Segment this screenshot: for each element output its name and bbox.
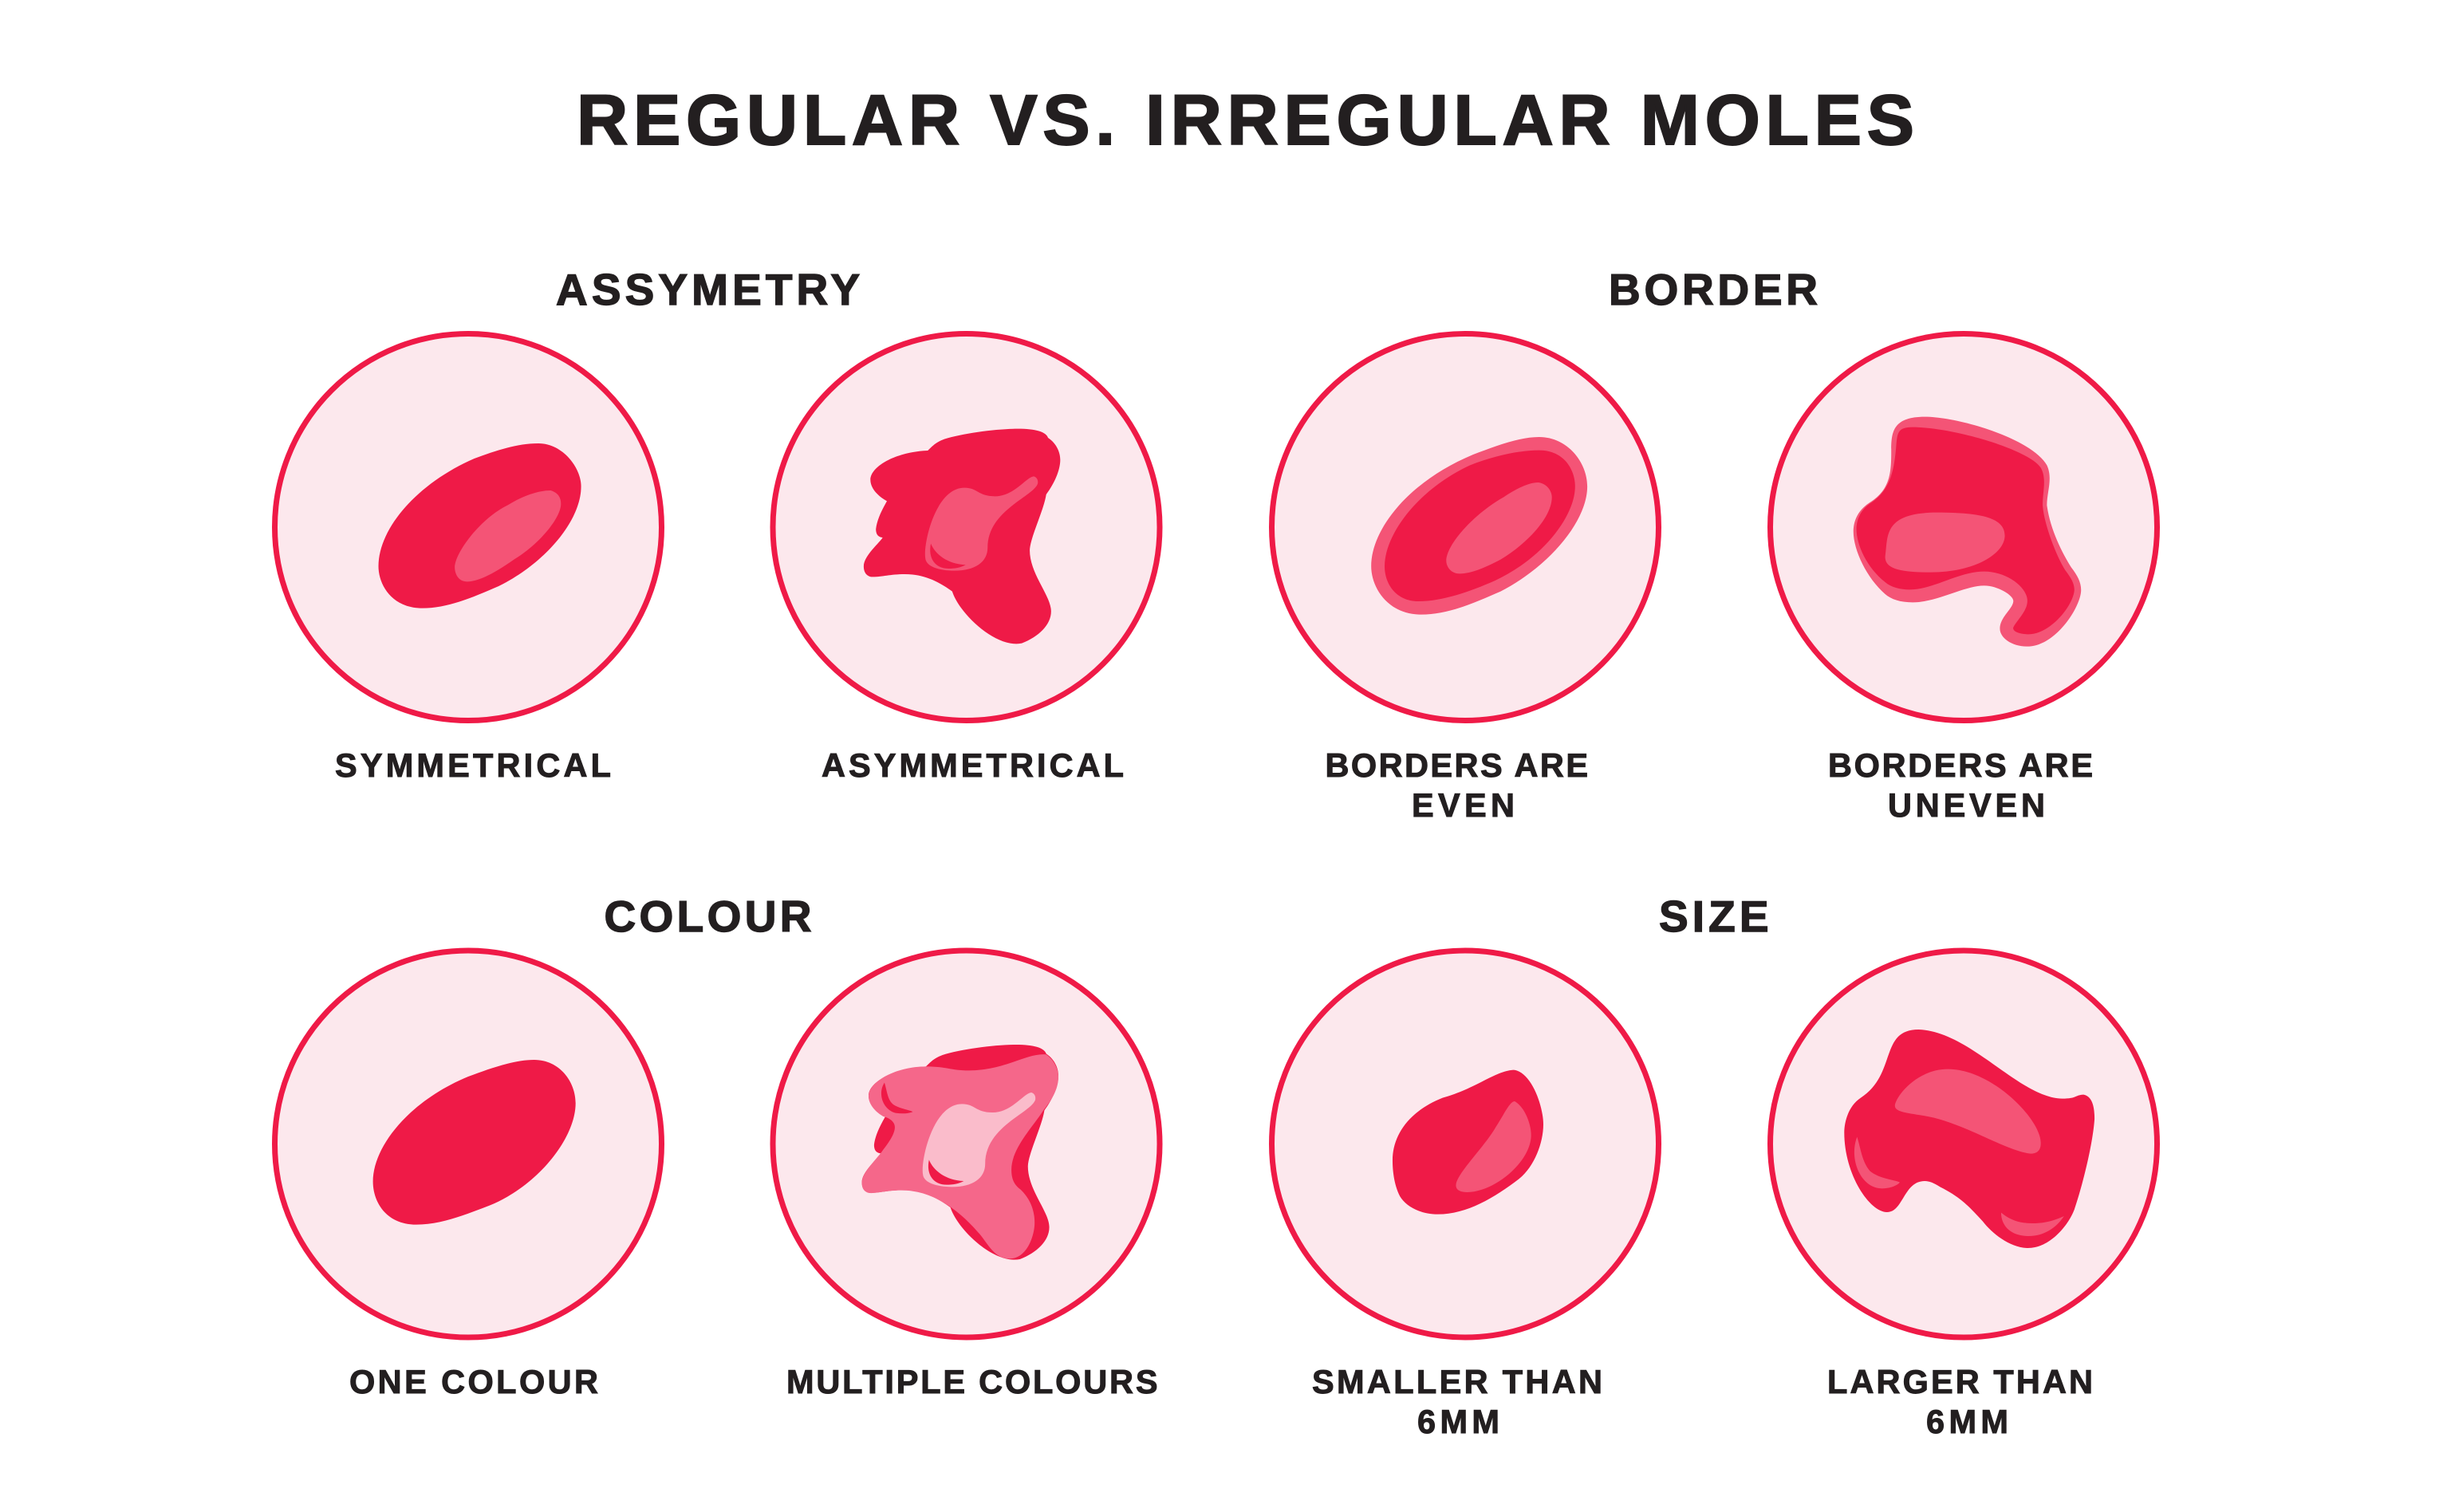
icon: symmetrical mole: [378, 443, 581, 608]
label: one colour: ONE COLOUR: [349, 1363, 598, 1400]
label: asymmetrical: ASYMMETRICAL: [822, 746, 1124, 784]
panel: large mole: [1771, 951, 2157, 1440]
icon: large mole: [1844, 1030, 2094, 1248]
circle background: [1771, 333, 2157, 721]
icon: one colour mole: [373, 1060, 576, 1225]
label: borders are even: BORDERS ARE: [1326, 746, 1588, 784]
panel: asymmetry section: [274, 265, 1160, 784]
panel: small mole: [1271, 951, 1659, 1440]
panel: size section: [1271, 892, 2157, 1440]
label: symmetrical: SYMMETRICAL: [335, 746, 611, 784]
panel: symmetrical mole: [274, 333, 662, 784]
circle background: [1271, 951, 1659, 1337]
panel: colour section: [274, 892, 1160, 1400]
label: borders are even: EVEN: [1412, 786, 1515, 824]
label: borders are uneven: [1828, 746, 2093, 824]
panel: uneven border mole: [1771, 333, 2157, 824]
heading: colour: COLOUR: [605, 892, 812, 941]
label: borders are even: [1326, 746, 1588, 824]
panel: one colour mole: [274, 951, 662, 1400]
icon: asymmetrical mole: [864, 429, 1060, 644]
label: smaller than 6mm: SMALLER THAN: [1312, 1363, 1602, 1400]
label: larger than 6mm: [1827, 1363, 2093, 1440]
label: larger than 6mm: 6MM: [1926, 1403, 2008, 1440]
icon: uneven border mole: [1854, 417, 2081, 647]
circle background: [274, 333, 662, 721]
circle background: [773, 951, 1160, 1337]
heading: size: SIZE: [1659, 892, 1769, 941]
label: multiple colours: MULTIPLE COLOURS: [786, 1363, 1158, 1400]
circle background: [274, 951, 662, 1337]
panel: asymmetrical mole: [773, 333, 1160, 784]
circle background: [773, 333, 1160, 721]
panel: border section: [1271, 265, 2157, 824]
label: borders are uneven: BORDERS ARE: [1828, 746, 2093, 784]
icon: even border mole: [1371, 437, 1587, 615]
label: smaller than 6mm: 6MM: [1417, 1403, 1499, 1440]
heading: border: BORDER: [1609, 265, 1818, 314]
label: smaller than 6mm: [1312, 1363, 1602, 1440]
panel: even border mole: [1271, 333, 1659, 824]
icon: multiple colours mole: [862, 1045, 1058, 1260]
circle background: [1771, 951, 2157, 1337]
label: borders are uneven: UNEVEN: [1888, 786, 2045, 824]
circle background: [1271, 333, 1659, 721]
title: REGULAR VS. IRREGULAR MOLES: [577, 80, 1914, 159]
label: larger than 6mm: LARGER THAN: [1827, 1363, 2093, 1400]
panel: multiple colours mole: [773, 951, 1160, 1400]
heading: assymetry: ASSYMETRY: [556, 265, 860, 314]
icon: small mole: [1393, 1070, 1543, 1215]
